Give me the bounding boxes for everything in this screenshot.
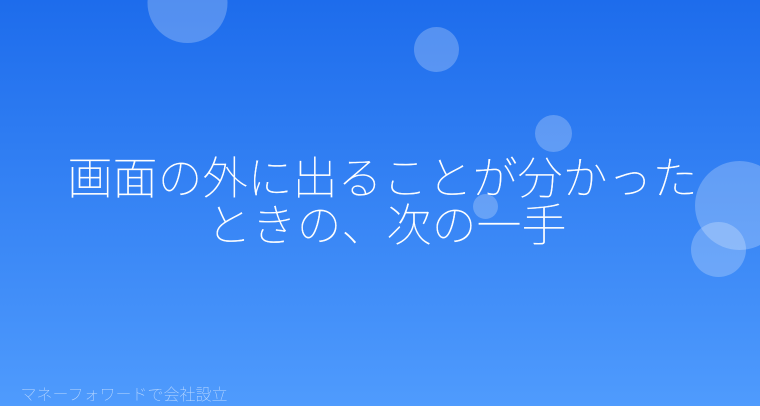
title: ときの、次の一手 xyxy=(206,200,567,251)
footer brand text: マネーフォワードで会社設立 xyxy=(20,386,228,404)
title: 画面の外に出ることが分かった xyxy=(67,153,698,204)
title xyxy=(67,153,698,251)
decorative bubbles xyxy=(148,0,760,277)
